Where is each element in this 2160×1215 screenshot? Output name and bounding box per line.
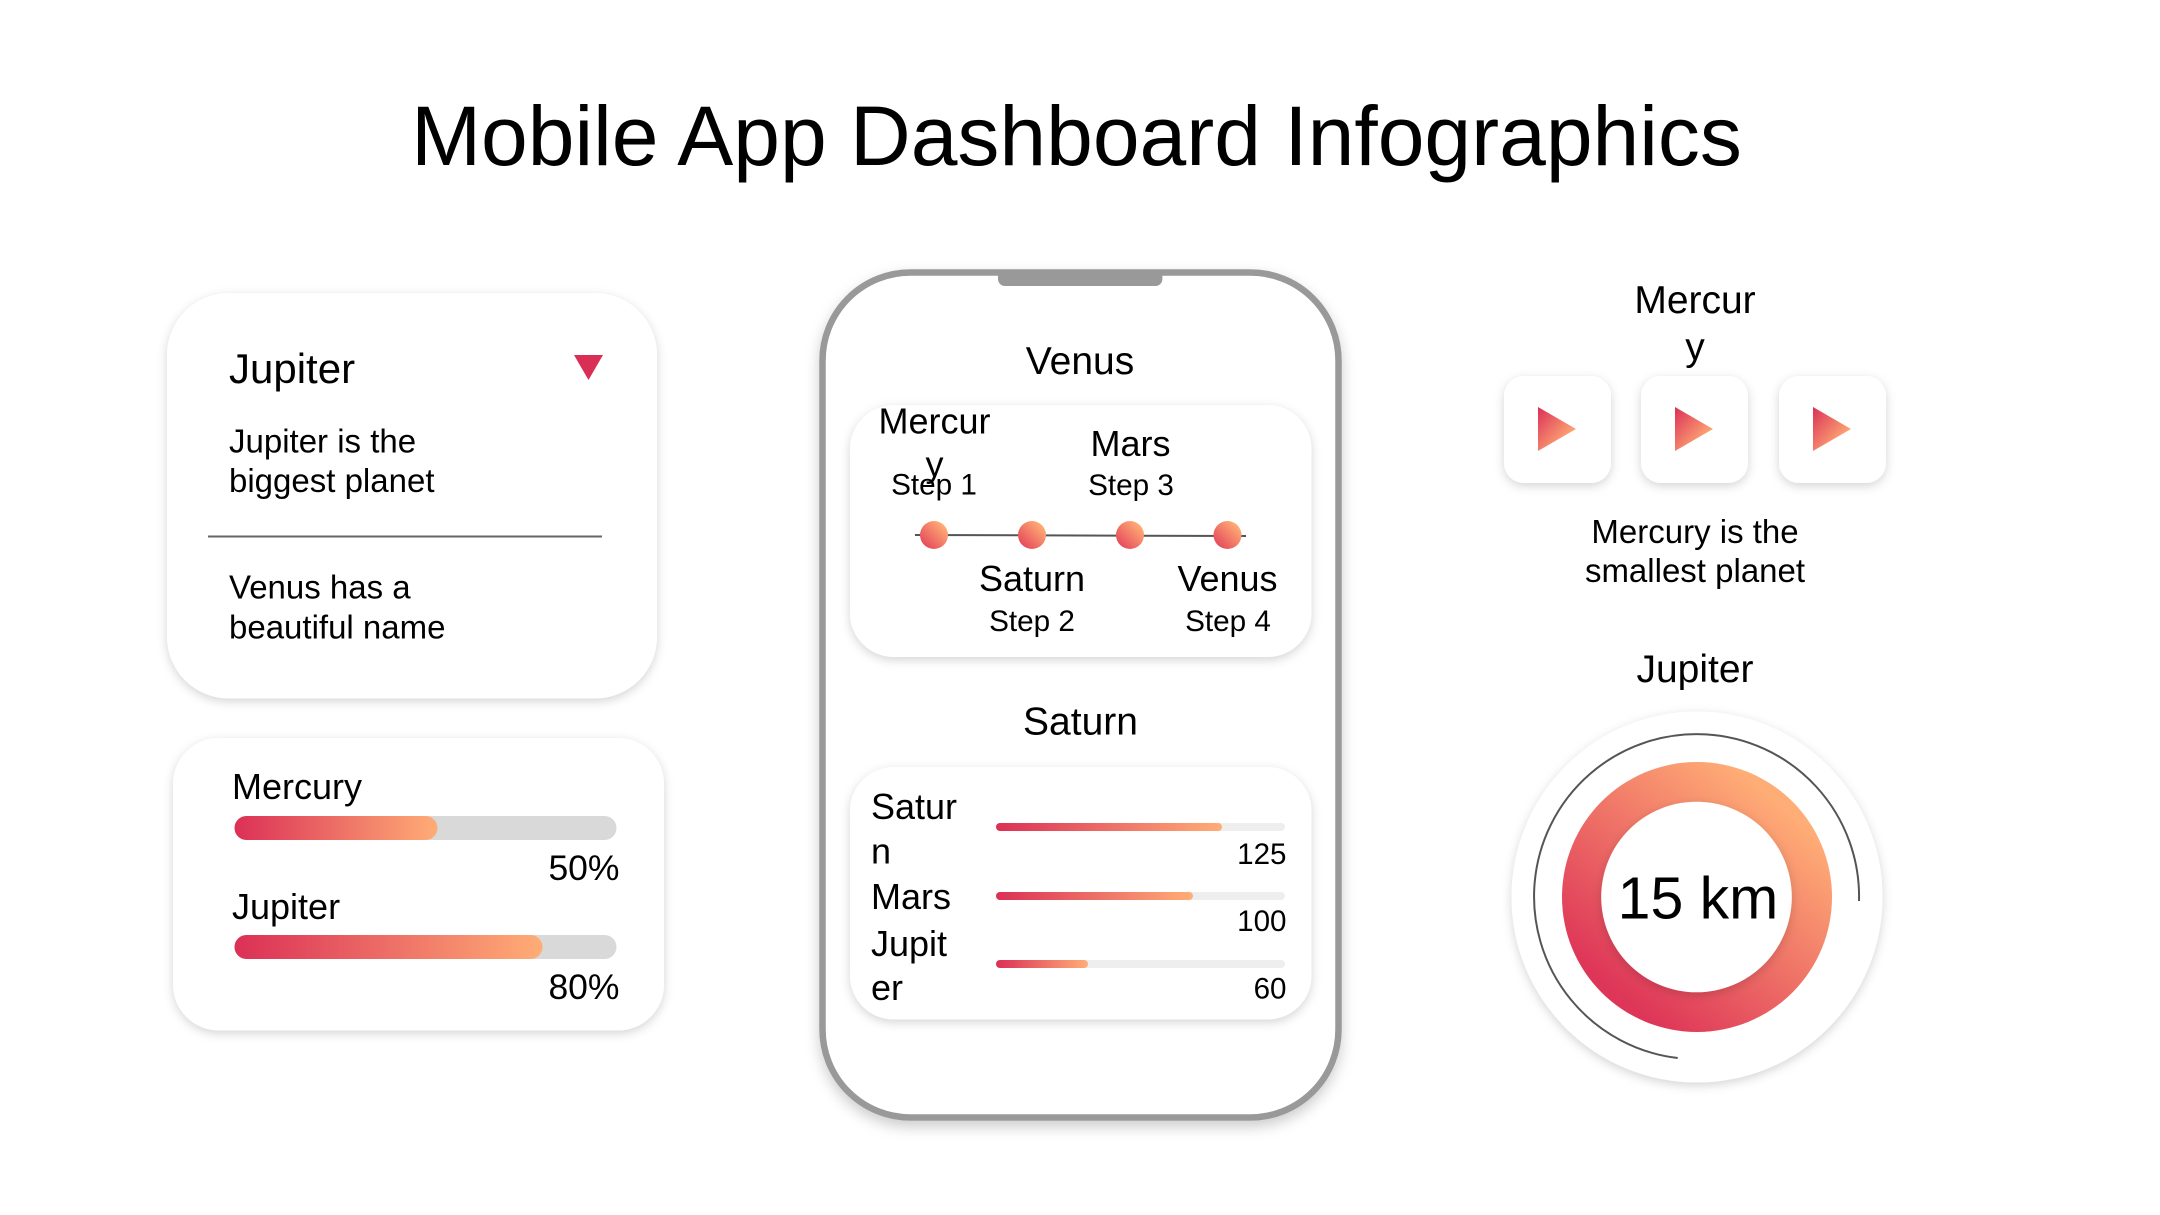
text block: Mercury description: Mercury is the (1591, 513, 1799, 550)
value: 80%: 80% (548, 967, 620, 1007)
progress bar: Jupiter 80% (234, 935, 616, 959)
value: 125: 125 (1237, 838, 1286, 871)
step 1: Mercury: Step 1 (891, 468, 977, 502)
heading: Mercury: y (1685, 326, 1705, 369)
step 1: Mercury: y (926, 444, 944, 484)
card background (850, 405, 1312, 657)
value: 50%: 50% (548, 848, 620, 888)
step 3: Mars: Step 3 (1088, 469, 1174, 502)
progress bar: Mercury 50% (234, 816, 616, 840)
panel: Jupiter and Venus card (167, 293, 657, 698)
bar: Mars 100 (996, 892, 1285, 900)
card background (173, 738, 664, 1030)
step 4: Venus: Step 4 (1185, 605, 1271, 638)
title: Mobile App Dashboard Infographics (411, 89, 1742, 183)
step 2: Saturn: Saturn (979, 558, 1085, 599)
text block: Venus description: Venus has a (229, 568, 411, 606)
bar labels: n (871, 830, 891, 872)
label: Jupiter: Jupiter (232, 886, 340, 927)
heading: Jupiter: Jupiter (1636, 648, 1754, 691)
timeline dots (920, 521, 1242, 549)
play button 3 (1779, 376, 1886, 483)
label: Mercury: Mercury (232, 766, 362, 807)
step 3: Mars: Mars (1090, 423, 1170, 464)
card heading: Jupiter (229, 345, 355, 392)
gauge base circle (1512, 712, 1882, 1082)
step 2: Saturn: Step 2 (989, 605, 1075, 638)
bar: Jupiter 60 (996, 960, 1285, 968)
gauge outer arc (1534, 734, 1859, 1058)
panel: horizontal bars card (850, 767, 1312, 1020)
chart: 15 km radial gauge (1512, 712, 1882, 1082)
heading: Mercury: Mercur (1634, 279, 1756, 322)
bar: Saturn 125 (996, 823, 1285, 831)
value: 60: 60 (1254, 972, 1286, 1006)
phone frame (822, 272, 1338, 1118)
step 1: Mercury: Mercur (878, 400, 991, 442)
play button 1 (1504, 376, 1611, 483)
heading: Saturn: Saturn (1023, 700, 1138, 744)
step 4: Venus: Venus (1177, 558, 1278, 599)
bar labels: er (871, 967, 903, 1008)
panel: play buttons (1504, 376, 1886, 483)
text block: Jupiter description: Jupiter is the (229, 422, 416, 460)
timeline line (915, 535, 1246, 536)
bar labels: Mars (871, 876, 951, 917)
phone notch (998, 272, 1162, 286)
panel: progress bars card (173, 738, 664, 1030)
heading: Venus: Venus (1026, 340, 1134, 383)
text block: Mercury description: smallest planet (1585, 552, 1805, 589)
text block: Jupiter description: biggest planet (229, 462, 434, 499)
card background (167, 293, 657, 698)
gauge gradient ring (1562, 762, 1832, 1032)
icon: dropdown triangle (574, 355, 603, 380)
text block: Venus description: beautiful name (229, 608, 445, 646)
play button 2 (1641, 376, 1748, 483)
gauge centre circle (1601, 802, 1792, 992)
bar labels: Jupit (871, 923, 947, 964)
bar labels: Satur (871, 786, 957, 827)
card background (850, 767, 1312, 1020)
gauge value: 15 km (1618, 866, 1778, 932)
panel: phone mockup (822, 272, 1338, 1118)
panel: timeline card (850, 400, 1312, 657)
value: 100: 100 (1237, 905, 1286, 938)
